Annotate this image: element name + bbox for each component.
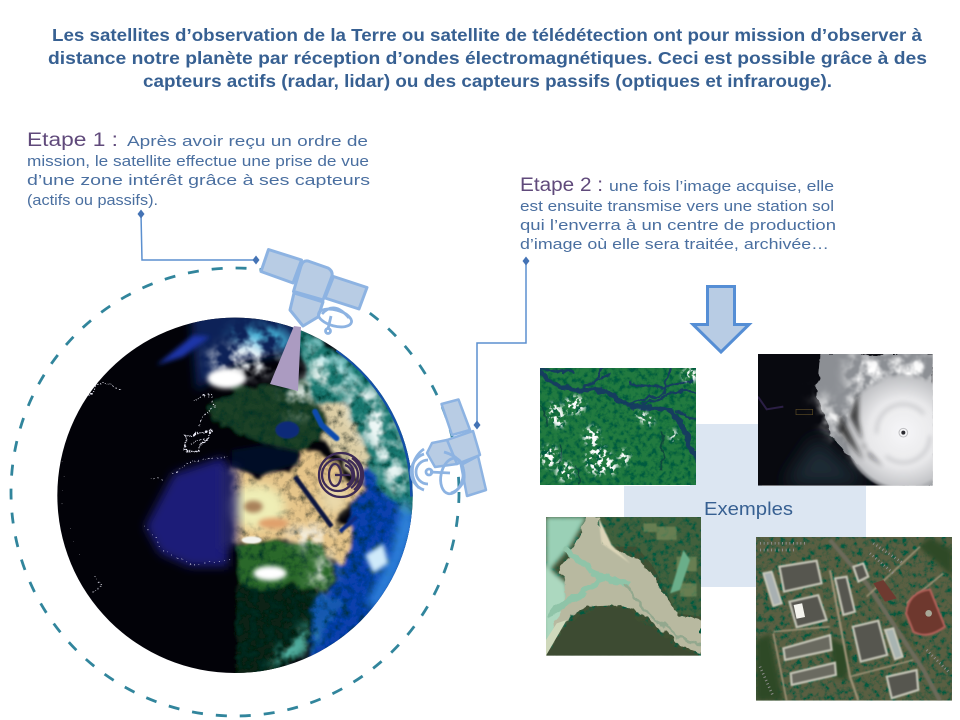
image: river forest [537,367,698,485]
city lights [62,382,230,593]
arrow down [693,286,749,352]
connector: étape 1 to satellite 1 [138,210,260,264]
label: Exemples: Exemples [704,498,793,519]
title: distance notre planète par réception d’ondes électromagnétiques. Ceci est possible grâce à des [48,48,927,68]
text block: étape 2: est ensuite transmise vers une station sol [520,198,834,215]
text block: étape 1 [27,130,370,209]
text block: étape 2: d’image où elle sera traitée, archivée… [520,236,829,253]
icon: ground station [319,453,363,497]
text block: étape 2: Etape 2 : [520,175,603,196]
title: Les satellites d’observation de la Terre ou satellite de télédétection ont pour mission d’observer à [52,25,922,45]
text block: étape 1: d’une zone intérêt grâce à ses capteurs [27,172,370,189]
title: capteurs actifs (radar, lidar) ou des capteurs passifs (optiques et infrarouge). [143,71,832,91]
text block: étape 1: mission, le satellite effectue une prise de vue [27,153,369,170]
image: urban area [756,537,952,701]
icon: satellite 1 [261,250,367,334]
text block: étape 1: Etape 1 : [27,130,118,151]
icon: satellite 2 [411,400,486,496]
text block: étape 1: Après avoir reçu un ordre de [127,133,368,150]
text block: étape 2 [520,175,836,253]
earth globe [50,310,420,680]
title [48,25,927,91]
beam of satellite 1 [270,326,301,391]
dashed orbit [11,268,459,716]
image: estuary [543,517,701,658]
panel: examples backdrop [624,424,866,587]
text block: étape 2: une fois l’image acquise, elle [609,178,834,195]
text block: étape 2: qui l’enverra à un centre de production [520,217,836,234]
text block: étape 1: (actifs ou passifs). [27,192,158,209]
image: hurricane [758,354,933,486]
connector: étape 2 to satellite 2 [474,256,530,430]
